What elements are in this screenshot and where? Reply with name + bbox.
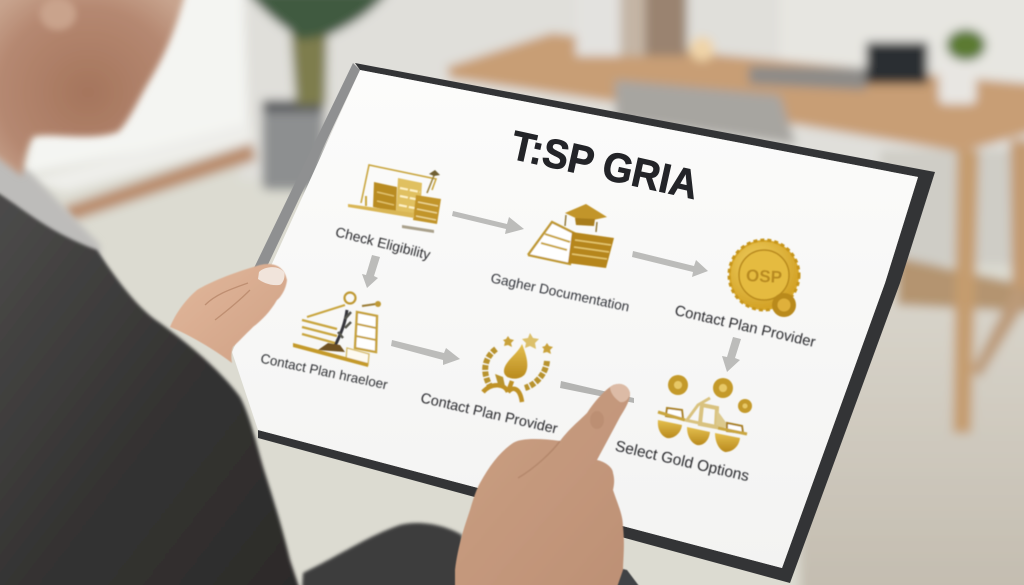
- label: Select Gold Options: [614, 438, 751, 485]
- hand: right pointing: [455, 384, 630, 585]
- label: Contact Plan Provider: [673, 303, 817, 351]
- person: knee in dark trousers: [302, 523, 470, 585]
- icon: gold seal: OSP: [746, 266, 782, 287]
- white paper: [232, 70, 918, 568]
- step 1: check eligibility: [334, 165, 441, 263]
- sleeve at bottom: [448, 569, 642, 585]
- arrow: plan provider to gold options: [560, 381, 634, 403]
- clipboard board: [232, 63, 935, 583]
- icon: staff and ledger: [293, 292, 381, 367]
- person: head and neck: [0, 0, 186, 176]
- icon: coins and bowls: [658, 375, 752, 452]
- label: Check Eligibility: [334, 223, 432, 263]
- icon: gold seal: [729, 240, 799, 317]
- arrow: seal to select gold options: [722, 337, 741, 372]
- icon: gold drop with laurel: [483, 333, 553, 402]
- label: Contact Plan hraeloer: [259, 351, 390, 392]
- label: Contact Plan Provider: [419, 390, 559, 438]
- step 4: contact plan provider (left): [259, 292, 390, 392]
- person: jacket shoulder: [0, 188, 300, 585]
- person: shirt collar: [0, 150, 100, 272]
- arrow: eligibility to provider: [362, 255, 380, 288]
- label: Gagher Documentation: [489, 270, 631, 315]
- board black frame: [258, 63, 935, 583]
- step 3: contact plan provider seal: [673, 240, 817, 351]
- board grey left edge: [254, 63, 360, 275]
- icon: buildings: [348, 165, 441, 233]
- title: T:SP GRIA: [507, 122, 703, 208]
- arrow: eligibility to documentation: [452, 211, 524, 234]
- arrow: provider to plan provider: [391, 340, 460, 365]
- arrow: documentation to seal: [632, 251, 708, 277]
- step 2: gather documentation: [489, 204, 631, 315]
- step 6: select gold options: [614, 375, 752, 485]
- hand: left holding board: [170, 264, 287, 363]
- icon: book and graduation cap: [528, 204, 614, 268]
- step 5: contact plan provider (center): [419, 333, 559, 438]
